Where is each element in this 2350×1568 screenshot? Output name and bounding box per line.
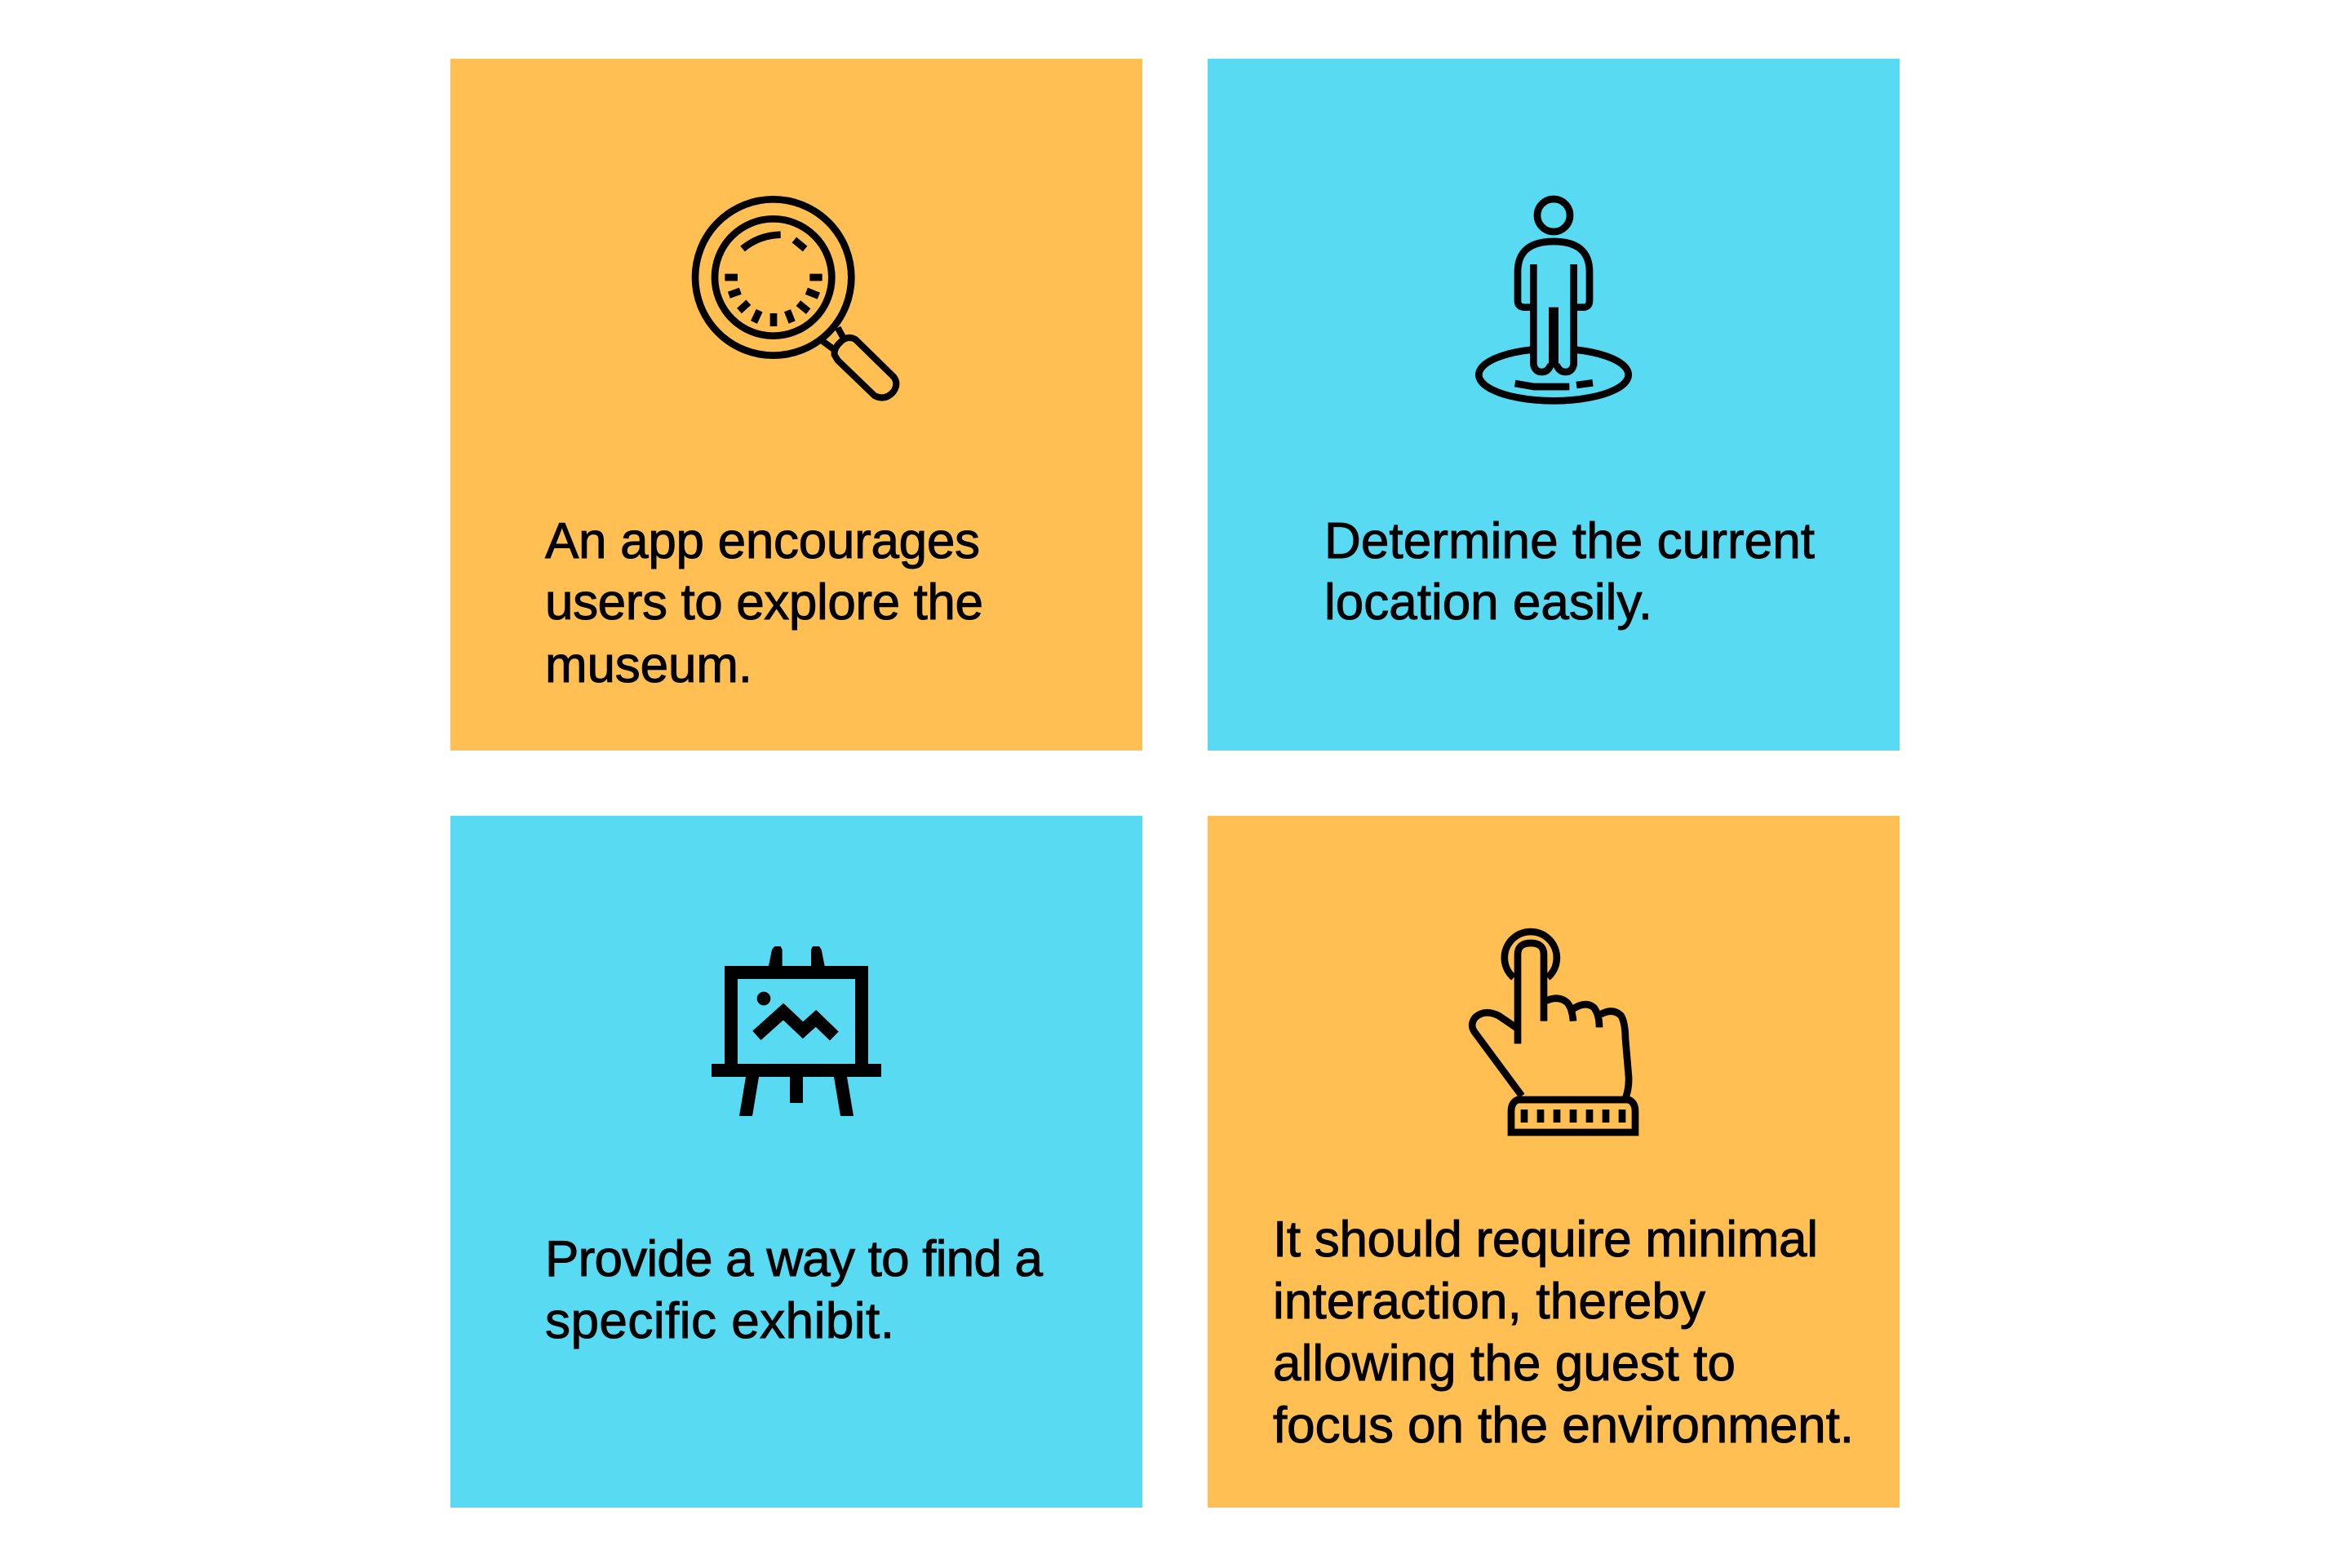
panel: find an exhibit — [450, 816, 1142, 1508]
text: minimal interaction — [1273, 1211, 1854, 1454]
panel background: orange — [1208, 816, 1900, 1508]
text: minimal interaction: interaction, thereby — [1273, 1273, 1705, 1330]
text: find an exhibit: specific exhibit. — [545, 1293, 894, 1349]
text: explore the museum: users to explore the — [545, 574, 983, 631]
icon: person standing on location spot — [1479, 199, 1629, 401]
text: current location: Determine the current — [1324, 513, 1815, 569]
panel background: orange — [450, 59, 1142, 751]
text: explore the museum — [545, 513, 983, 693]
panel background: cyan — [1208, 59, 1900, 751]
text: find an exhibit: Provide a way to find a — [545, 1231, 1044, 1287]
panel: explore the museum — [450, 59, 1142, 751]
panel background: cyan — [450, 816, 1142, 1508]
icon: hand tapping — [1472, 932, 1635, 1132]
panel: current location — [1208, 59, 1900, 751]
text: explore the museum: museum. — [545, 637, 752, 693]
text: current location: location easily. — [1324, 574, 1652, 631]
panel: minimal interaction — [1208, 816, 1900, 1508]
text: explore the museum: An app encourages — [545, 513, 980, 569]
text: minimal interaction: It should require minimal — [1273, 1211, 1818, 1268]
icon: magnifying glass — [695, 199, 896, 397]
text: find an exhibit — [545, 1231, 1044, 1349]
text: current location — [1324, 513, 1815, 631]
icon: painting on easel — [712, 946, 881, 1116]
text: minimal interaction: focus on the environment. — [1273, 1397, 1854, 1454]
text: minimal interaction: allowing the guest to — [1273, 1335, 1736, 1392]
